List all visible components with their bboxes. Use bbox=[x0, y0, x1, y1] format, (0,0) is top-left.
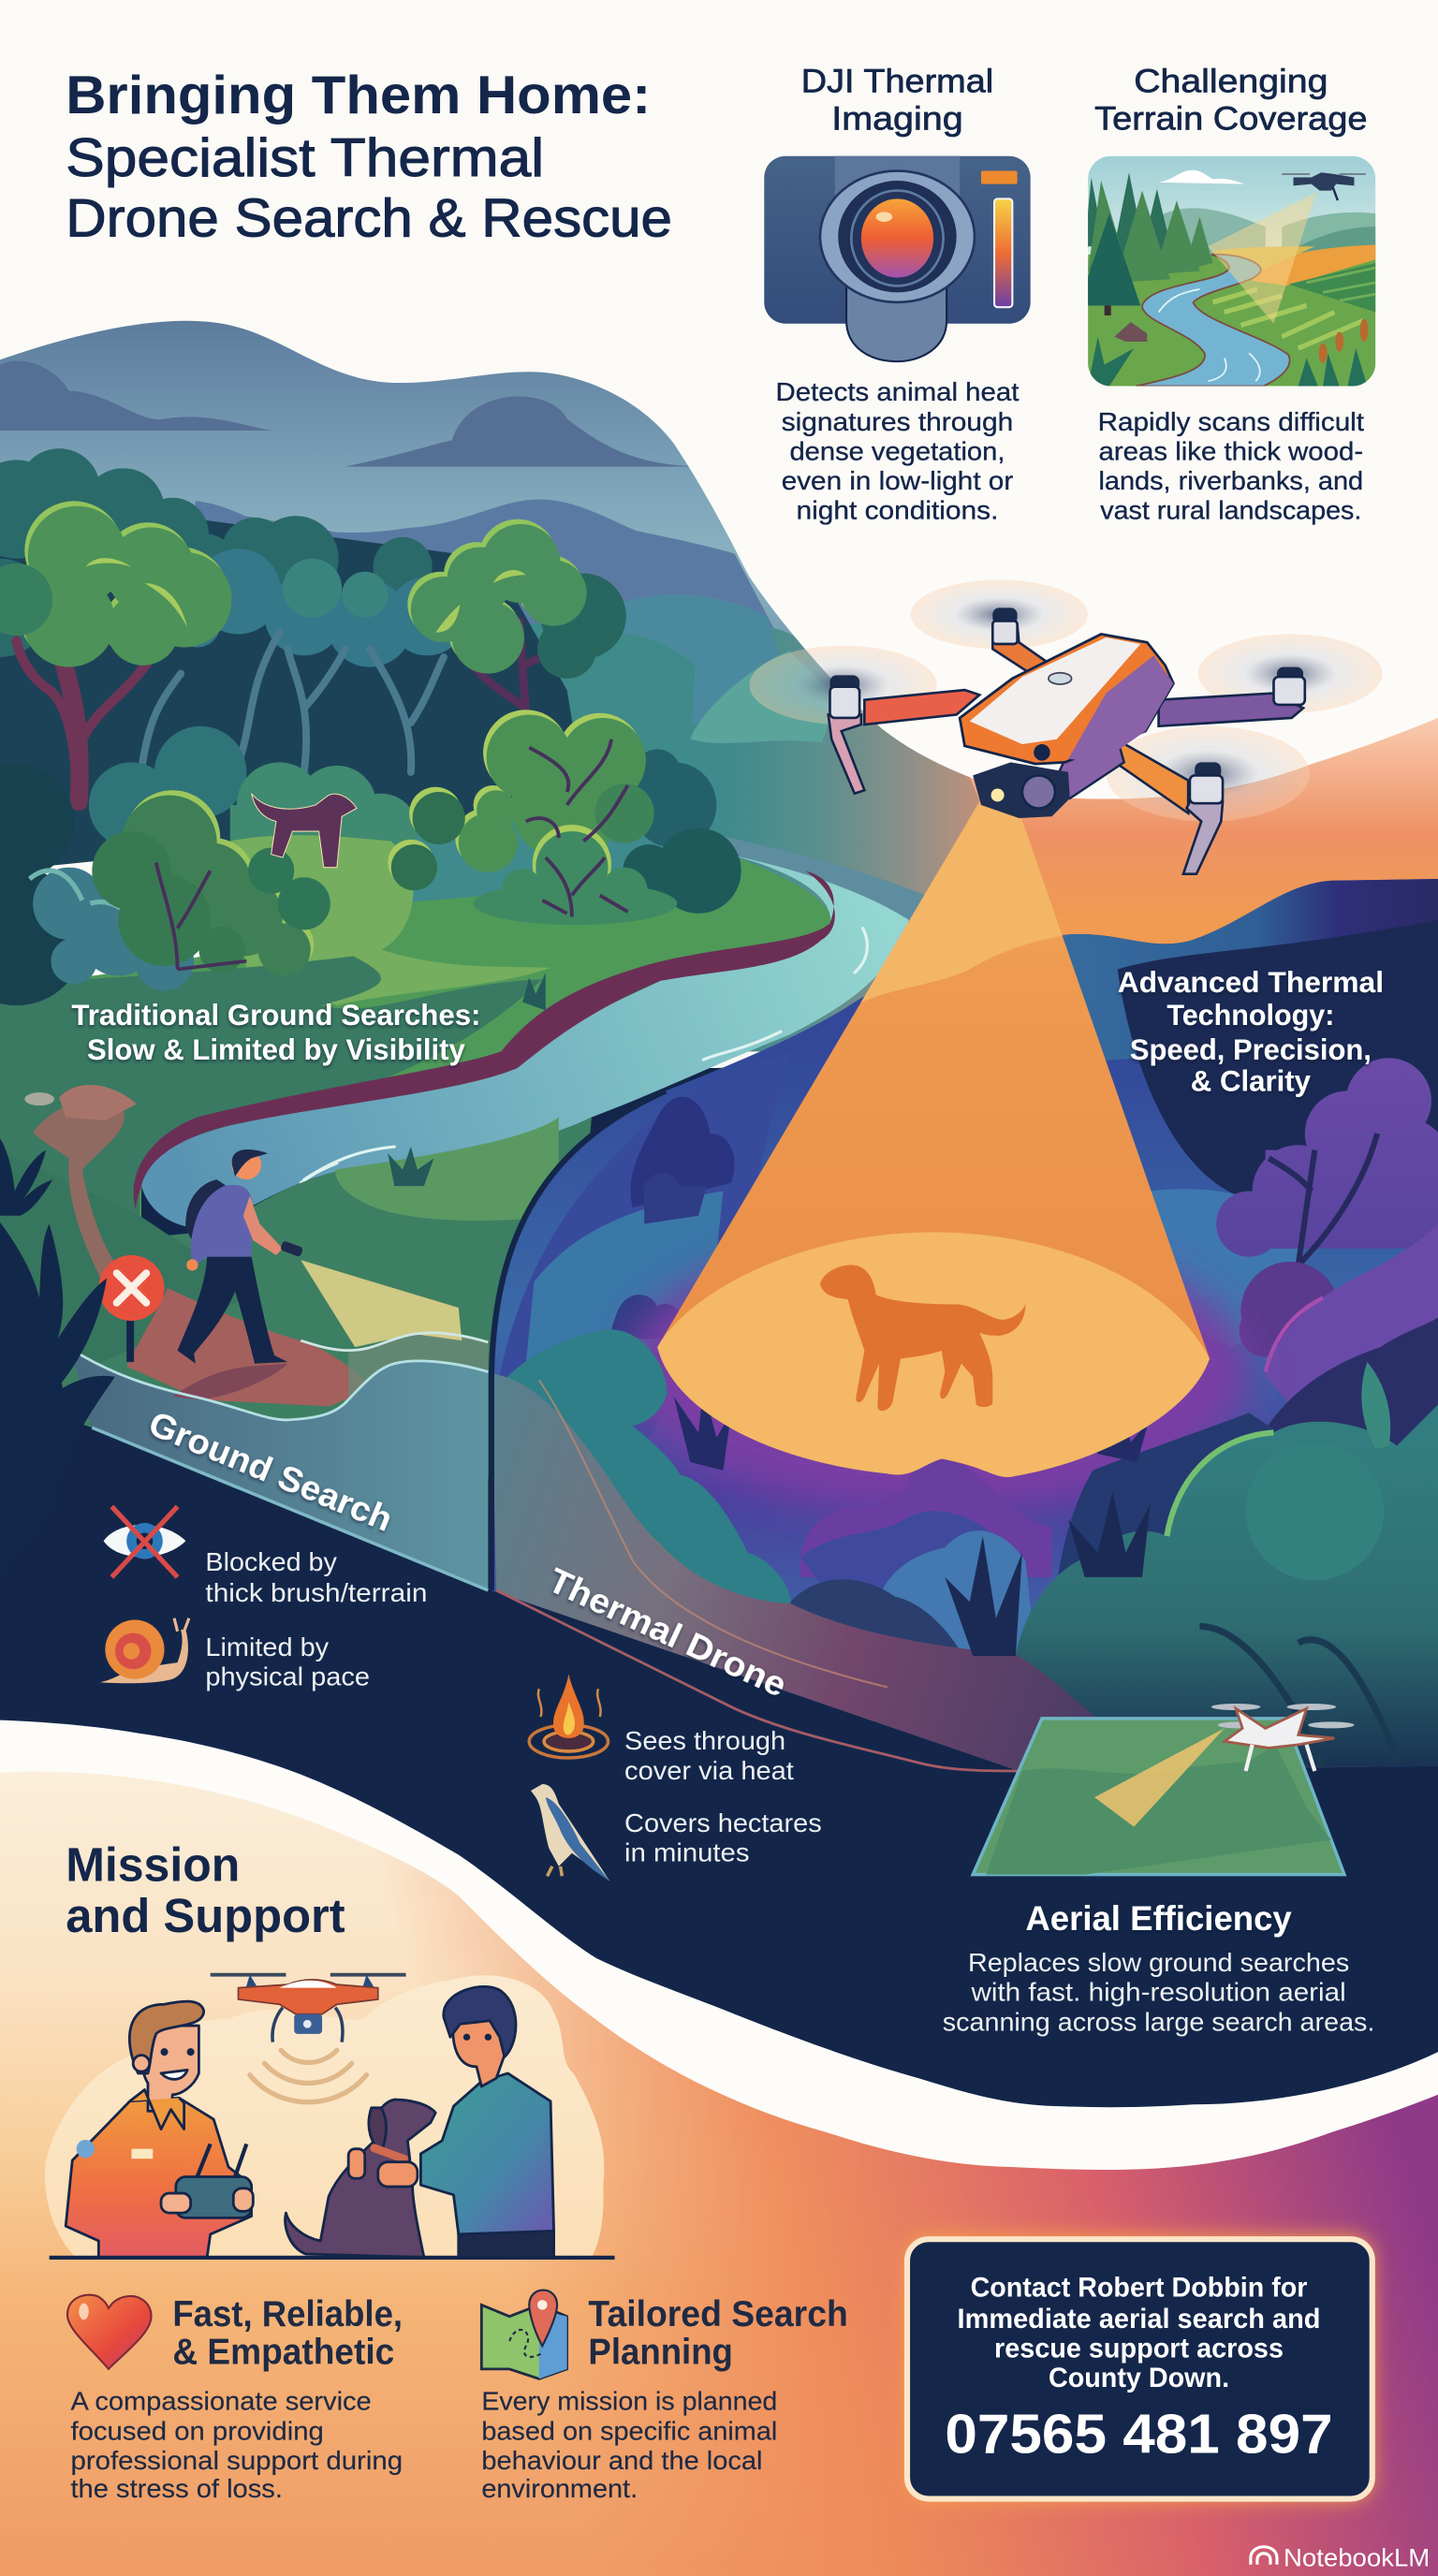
left bush bbox=[92, 790, 330, 976]
text: aerial efficiency description: Replaces slow ground searches bbox=[968, 1948, 1349, 1977]
text: mission planning description: behaviour and the local bbox=[481, 2446, 763, 2475]
icon: terrain card bbox=[1078, 156, 1375, 386]
heading: fast reliable empathetic: & Empathetic bbox=[172, 2333, 394, 2373]
heading: traditional ground searches: Traditional Ground Searches: bbox=[71, 998, 480, 1032]
text: thermal imaging description: even in low-light or bbox=[782, 466, 1013, 495]
text: mission planning description bbox=[481, 2387, 777, 2503]
ground line bbox=[50, 2256, 615, 2260]
chart: aerial scan field bbox=[973, 1704, 1354, 1875]
text: terrain description: areas like thick wood- bbox=[1099, 436, 1363, 465]
title bbox=[66, 66, 672, 249]
heat ellipse bbox=[657, 1232, 1210, 1477]
white separator band bbox=[0, 1692, 1438, 2202]
heading: traditional ground searches bbox=[71, 998, 480, 1066]
title: Specialist Thermal bbox=[66, 128, 544, 188]
teal tree mass bbox=[1016, 1362, 1438, 1766]
callout: contact box: County Down. bbox=[1049, 2363, 1229, 2393]
text: compassionate description: professional support during bbox=[70, 2446, 403, 2475]
callout: contact box: 07565 481 897 bbox=[945, 2402, 1333, 2465]
illustration: mission drone bbox=[211, 1975, 406, 2102]
scan beam bbox=[1208, 192, 1316, 324]
far stream bbox=[725, 837, 925, 922]
dog bbox=[286, 2100, 435, 2258]
watermark: NotebookLM: NotebookLM bbox=[1284, 2542, 1430, 2571]
forest trunks bbox=[139, 633, 444, 781]
illustration: owner with dog bbox=[286, 1986, 554, 2258]
thermal divider arc bbox=[492, 1090, 666, 1590]
right trunk bbox=[470, 617, 541, 710]
forest floor shade bbox=[0, 520, 573, 865]
heading: fast reliable empathetic bbox=[172, 2294, 403, 2373]
text: compassionate description bbox=[70, 2387, 403, 2503]
heading: fast reliable empathetic: Fast, Reliable, bbox=[172, 2294, 403, 2334]
label: thermal drone: Thermal Drone bbox=[542, 1560, 793, 1705]
heading: DJI thermal imaging: DJI Thermal bbox=[801, 63, 993, 99]
left trunk bbox=[17, 640, 151, 801]
heading: mission and support: and Support bbox=[66, 1889, 345, 1942]
text: covers hectares: in minutes bbox=[624, 1838, 749, 1867]
icon: main drone bbox=[749, 580, 1382, 874]
back trees bbox=[0, 448, 433, 657]
text: compassionate description: focused on providing bbox=[70, 2416, 324, 2445]
heading: tailored search planning: Tailored Search bbox=[588, 2294, 848, 2334]
text: terrain description bbox=[1098, 407, 1364, 525]
text: blocked by terrain: thick brush/terrain bbox=[205, 1578, 427, 1607]
text: thermal imaging description: signatures through bbox=[782, 407, 1013, 436]
blue ridge bbox=[1062, 879, 1438, 1061]
pines bbox=[1085, 172, 1177, 279]
icon: dog in forest bbox=[252, 794, 357, 868]
heading: thermal technology: Advanced Thermal bbox=[1118, 965, 1384, 999]
text: sees through cover: Sees through bbox=[624, 1726, 785, 1755]
right blue slope bbox=[1151, 1189, 1299, 1347]
icon: snail bbox=[100, 1618, 189, 1683]
text: sees through cover: cover via heat bbox=[624, 1756, 794, 1785]
text: sees through cover bbox=[624, 1726, 794, 1785]
heading: DJI thermal imaging: Imaging bbox=[831, 101, 963, 138]
heading: thermal technology: & Clarity bbox=[1191, 1063, 1311, 1097]
heading: aerial efficiency: Aerial Efficiency bbox=[1025, 1899, 1292, 1938]
heading: mission and support bbox=[66, 1838, 345, 1942]
fields bbox=[1253, 245, 1375, 285]
dark foreground plants bbox=[0, 1138, 115, 1577]
heading: mission and support: Mission bbox=[66, 1838, 240, 1892]
arms bbox=[829, 621, 1305, 874]
right tree bbox=[407, 520, 626, 679]
panel: navy lower field bbox=[0, 1051, 1438, 2107]
heading: challenging terrain coverage bbox=[1094, 63, 1368, 138]
dark left bushes bbox=[0, 764, 85, 1005]
icon: map with pin bbox=[481, 2291, 567, 2378]
heading: thermal technology: Technology: bbox=[1167, 998, 1334, 1032]
panel: ground search landscape bbox=[0, 320, 980, 1479]
dark navy behind text bbox=[1118, 920, 1438, 1199]
purple trees right bbox=[1216, 1058, 1438, 1257]
left blue hills bbox=[500, 1131, 768, 1439]
text: aerial efficiency description: with fast. high-resolution aerial bbox=[970, 1978, 1346, 2007]
right bush cluster bbox=[388, 710, 741, 925]
grass tufts bbox=[388, 973, 546, 1186]
text: covers hectares: Covers hectares bbox=[624, 1808, 822, 1837]
heading: challenging terrain coverage: Terrain Coverage bbox=[1094, 101, 1368, 138]
navy mound bbox=[1051, 1412, 1299, 1660]
icon: red stop sign bbox=[98, 1255, 165, 1362]
text: terrain description: lands, riverbanks, and bbox=[1099, 466, 1363, 495]
icon: heat flame bbox=[529, 1674, 609, 1758]
text: terrain description: vast rural landscapes. bbox=[1100, 496, 1361, 525]
title: Drone Search & Rescue bbox=[66, 189, 672, 249]
text: compassionate description: the stress of loss. bbox=[70, 2474, 283, 2503]
callout: contact box: rescue support across bbox=[994, 2334, 1284, 2364]
plants bbox=[674, 1388, 1149, 1471]
river bbox=[1136, 255, 1290, 386]
heading: DJI thermal imaging bbox=[801, 63, 993, 138]
icon: thermal camera bbox=[764, 156, 1031, 361]
icon: person with torch bbox=[178, 1149, 303, 1364]
title: Bringing Them Home: bbox=[66, 66, 651, 125]
lower ground bbox=[33, 1117, 592, 1479]
heading: tailored search planning: Planning bbox=[588, 2333, 733, 2373]
icon: blocked eye bbox=[104, 1506, 185, 1577]
white disc behind drone bbox=[716, 460, 1438, 799]
thermal band edge lines bbox=[496, 1380, 1019, 1771]
text: mission planning description: environment. bbox=[481, 2474, 638, 2503]
thermal beam cone bbox=[657, 788, 1210, 1477]
left big tree bbox=[0, 501, 232, 667]
icon: thermal dog silhouette bbox=[820, 1265, 1025, 1411]
thermal band bbox=[492, 1373, 1438, 1775]
text: blocked by terrain bbox=[205, 1547, 427, 1607]
panel: thermal drone landscape bbox=[485, 871, 1438, 1775]
gimbal bbox=[973, 762, 1070, 818]
text: thermal imaging description: dense vegetation, bbox=[789, 436, 1005, 465]
text: terrain description: Rapidly scans difficult bbox=[1098, 407, 1364, 436]
text: limited by pace: Limited by bbox=[205, 1632, 329, 1661]
text: aerial efficiency description bbox=[943, 1948, 1374, 2036]
trail and beam bbox=[70, 1260, 488, 1590]
rock and trail bbox=[33, 1099, 125, 1281]
text: compassionate description: A compassionate service bbox=[70, 2387, 372, 2416]
panel: mission section background bbox=[0, 1772, 1438, 2576]
heading: thermal technology: Speed, Precision, bbox=[1130, 1032, 1372, 1066]
river bank bbox=[134, 871, 835, 1212]
grey teal bush bbox=[33, 868, 194, 990]
cream blob behind people bbox=[45, 1975, 604, 2258]
heading: tailored search planning bbox=[588, 2294, 848, 2373]
text: limited by pace: physical pace bbox=[205, 1662, 370, 1691]
body bbox=[960, 634, 1173, 764]
text: aerial efficiency description: scanning across large search areas. bbox=[943, 2007, 1374, 2036]
text: blocked by terrain: Blocked by bbox=[205, 1547, 337, 1576]
text: thermal imaging description bbox=[776, 377, 1020, 525]
distant sky and mountains bbox=[0, 320, 827, 674]
mid bushes bbox=[89, 726, 246, 848]
text: thermal imaging description: Detects animal heat bbox=[776, 377, 1020, 406]
heading: thermal technology bbox=[1118, 965, 1384, 1097]
icon: heart bbox=[67, 2295, 151, 2369]
icon: card small drone bbox=[1282, 172, 1366, 200]
text: limited by pace bbox=[205, 1632, 370, 1691]
heading: challenging terrain coverage: Challenging bbox=[1134, 63, 1328, 99]
plum and purple bumps bbox=[1240, 1262, 1340, 1360]
lower body bbox=[1051, 739, 1124, 798]
illustration: operator bbox=[66, 2001, 253, 2258]
purple halo under ellipse bbox=[624, 1232, 1249, 1512]
lower cloud shrubs bbox=[800, 1460, 1051, 1577]
mid trees bbox=[191, 549, 451, 667]
callout: contact box: Immediate aerial search and bbox=[958, 2304, 1320, 2334]
teal left hills bbox=[493, 1329, 792, 1610]
orange sky behind drone bbox=[740, 718, 1438, 1051]
icon: small drone bbox=[1211, 1704, 1354, 1771]
rock and reeds bbox=[1114, 322, 1147, 342]
label: ground search: Ground Search bbox=[143, 1404, 398, 1539]
propellers bbox=[749, 580, 1382, 822]
icon: hawk bbox=[531, 1784, 609, 1881]
text: mission planning description: based on specific animal bbox=[481, 2416, 777, 2445]
text: mission planning description: Every mission is planned bbox=[481, 2387, 777, 2416]
hill fading to orange bbox=[412, 623, 980, 1052]
text: covers hectares bbox=[624, 1808, 822, 1867]
callout: contact box: Contact Robert Dobbin for bbox=[971, 2273, 1308, 2304]
river bbox=[141, 856, 909, 1229]
callout: contact box bbox=[907, 2236, 1372, 2500]
heading: traditional ground searches: Slow & Limited by Visibility bbox=[87, 1032, 465, 1066]
bank and ground bbox=[88, 858, 831, 1217]
text: thermal imaging description: night conditions. bbox=[797, 496, 998, 525]
panel: ground search band bbox=[70, 1349, 488, 1590]
